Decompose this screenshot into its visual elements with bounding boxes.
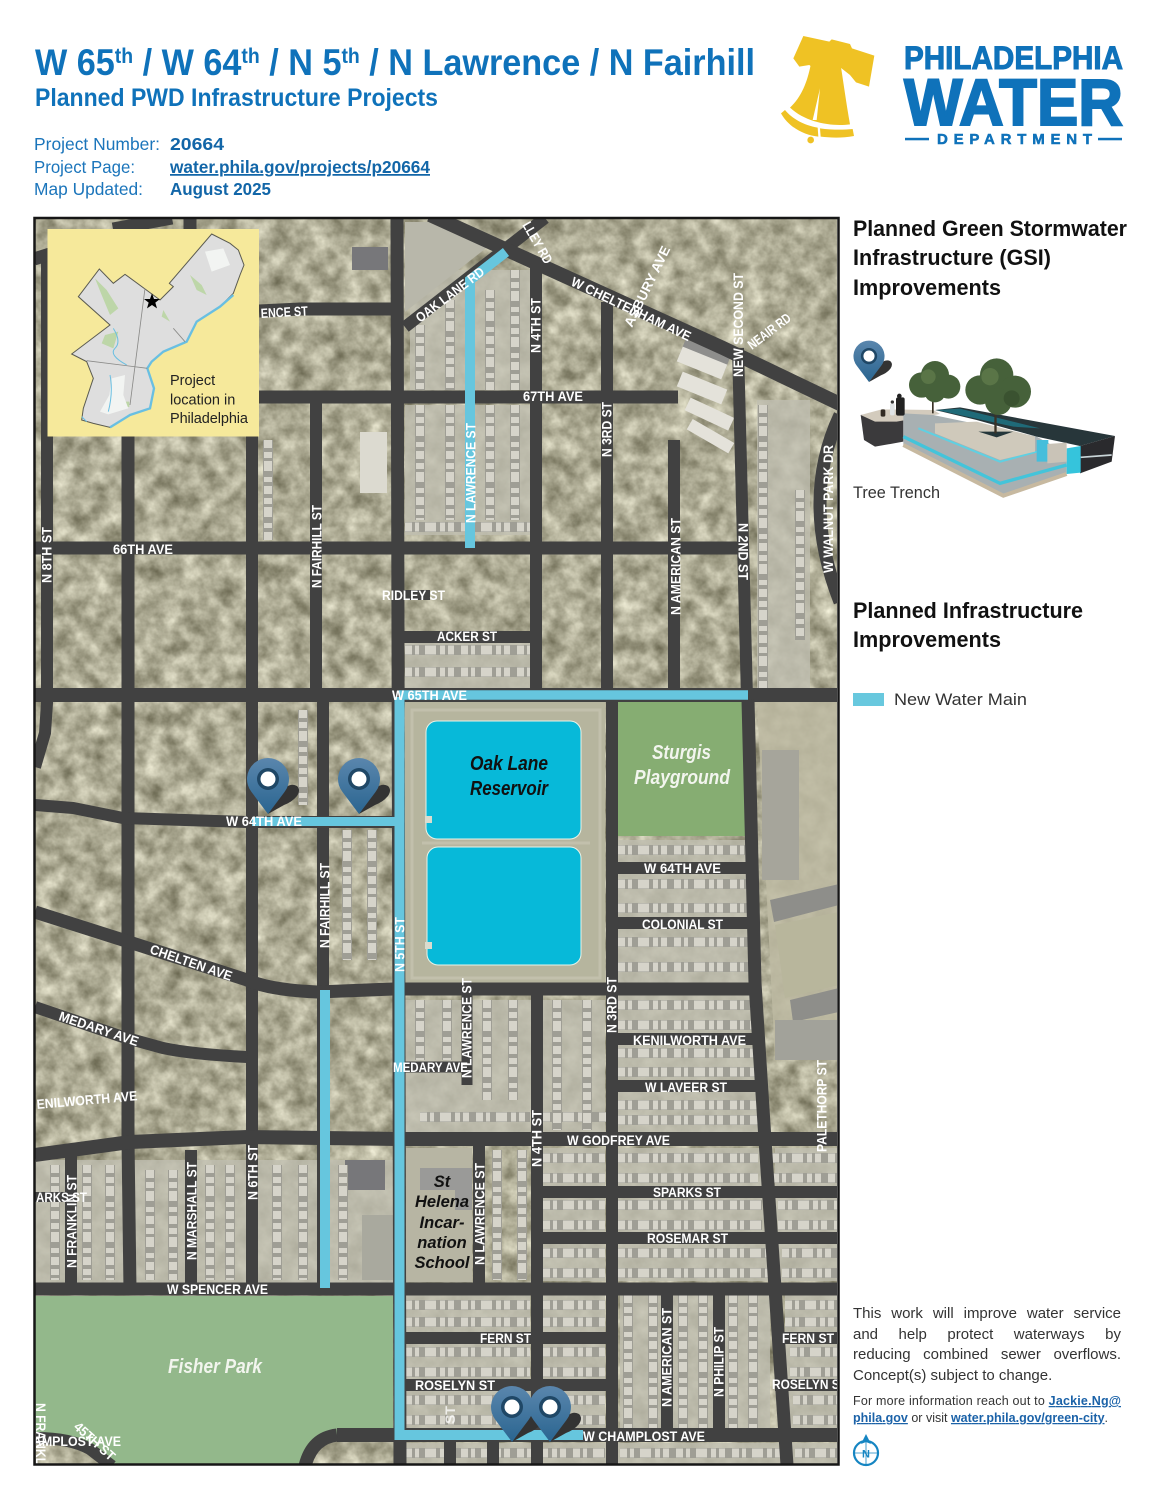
street labels: OAK LANE RD xyxy=(413,264,487,325)
street labels: N AMERICAN ST xyxy=(660,1307,674,1407)
icon: legend pin xyxy=(853,341,892,382)
project description: reducing combined sewer overflows. xyxy=(853,1346,1121,1363)
illustration: tree trench xyxy=(861,358,1115,496)
street labels: ARKS ST xyxy=(36,1190,88,1205)
street labels: N FRANKLIN ST xyxy=(64,1174,80,1268)
inset locator map: Project xyxy=(170,373,215,389)
project details: Project Page: xyxy=(34,157,135,177)
title: / N 5 xyxy=(260,42,341,83)
place names: Reservoir xyxy=(470,778,549,800)
aerial imagery base xyxy=(34,218,838,1465)
title: th xyxy=(241,45,260,68)
street labels: FERN ST xyxy=(480,1331,532,1346)
street labels: ACKER ST xyxy=(437,629,498,644)
street labels: W GODFREY AVE xyxy=(567,1133,670,1148)
project description: Concept(s) subject to change. xyxy=(853,1366,1052,1384)
street labels: ROSELYN ST xyxy=(772,1377,848,1392)
place names: Helena xyxy=(415,1193,469,1211)
logo wordmark: PHILADELPHIA xyxy=(904,40,1123,76)
GSI heading: Infrastructure (GSI) xyxy=(853,245,1051,270)
map xyxy=(15,215,848,1497)
logo wordmark: DEPARTMENT xyxy=(937,131,1092,148)
place names xyxy=(168,742,731,1378)
street labels: N LAWRENCE ST xyxy=(464,422,478,523)
street labels: 66TH AVE xyxy=(113,542,173,557)
new water main lines xyxy=(252,252,748,1435)
project pin: Champlost west xyxy=(491,1386,543,1442)
title: / N Lawrence / N Fairhill xyxy=(360,42,755,83)
street labels: N AMERICAN ST xyxy=(668,517,684,615)
place names: nation xyxy=(417,1234,467,1252)
street labels: 45TH ST xyxy=(71,1419,119,1464)
reservoir basin: north xyxy=(426,721,581,839)
project details: August 2025 xyxy=(170,179,271,199)
title: W 65 xyxy=(35,42,121,83)
street labels: N 4TH ST xyxy=(528,297,544,353)
GSI heading: Planned Green Stormwater xyxy=(853,216,1127,241)
street labels: FERN ST xyxy=(782,1331,835,1346)
street labels: W CHAMPLOST AVE xyxy=(583,1429,705,1444)
project pin: Champlost east xyxy=(529,1386,581,1442)
place names: Incar- xyxy=(420,1214,465,1232)
street labels: 67TH AVE xyxy=(523,389,583,404)
project details: water.phila.gov/projects/p20664 xyxy=(169,157,430,177)
street labels: N 6TH ST xyxy=(246,1144,260,1200)
reservoir basin: south xyxy=(427,847,581,965)
reservoir paths xyxy=(412,710,600,978)
reservoir inlets xyxy=(425,816,432,949)
street labels: LLEY RD xyxy=(519,219,555,267)
map frame xyxy=(34,218,838,1464)
row houses xyxy=(55,270,839,1453)
street labels: N MARSHALL ST xyxy=(184,1161,200,1260)
street labels: N 5TH ST xyxy=(392,916,408,972)
street labels: MEDARY AVE xyxy=(393,1060,468,1075)
street labels: ST xyxy=(443,1405,458,1424)
place names: Fisher Park xyxy=(168,1356,263,1378)
title: th xyxy=(115,45,133,68)
street labels: NEAIR RD xyxy=(745,310,794,352)
project details: Map Updated: xyxy=(34,179,143,199)
street labels: N 2ND ST xyxy=(736,523,750,581)
project description: and help protect waterways by xyxy=(853,1326,1121,1342)
street labels: ENCE ST xyxy=(260,304,309,321)
inset locator map: location in xyxy=(170,392,235,408)
GSI heading: Improvements xyxy=(853,275,1001,300)
logo wordmark: WATER xyxy=(904,65,1123,139)
project details xyxy=(34,134,430,199)
street labels: N LAWRENCE ST xyxy=(472,1162,488,1265)
street labels: W CHELTENHAM AVE xyxy=(569,274,693,344)
street labels: ENILWORTH AVE xyxy=(36,1088,138,1112)
street labels: ROSEMAR ST xyxy=(647,1231,729,1246)
street labels: N FAIRHILL ST xyxy=(318,862,332,948)
project description: This work will improve water service xyxy=(853,1305,1121,1322)
icon: north arrow xyxy=(854,1434,878,1465)
street labels: W WALNUT PARK DR xyxy=(821,445,836,573)
street labels: W 64TH AVE xyxy=(226,814,302,829)
street labels: N FAIRHILL ST xyxy=(310,504,324,588)
project pin: W 64th east xyxy=(338,758,390,814)
street labels: N PHILIP ST xyxy=(712,1326,726,1397)
project description xyxy=(853,1305,1121,1384)
park: Fisher Park xyxy=(35,1296,393,1465)
street labels: PALETHORP ST xyxy=(814,1059,830,1152)
GSI heading xyxy=(853,216,1127,300)
street labels: MEDARY AVE xyxy=(57,1009,141,1049)
street labels: CHAMPLOST AVE xyxy=(15,1434,121,1449)
inset locator map xyxy=(48,229,259,436)
contact note: For more information reach out to Jackie.Ng@ xyxy=(853,1394,1121,1408)
street labels: N 8TH ST xyxy=(40,526,54,583)
planned infrastructure heading: Planned Infrastructure xyxy=(853,598,1083,623)
street labels: COLONIAL ST xyxy=(642,917,724,932)
street labels: NEW SECOND ST xyxy=(731,272,746,377)
logo wordmark xyxy=(904,40,1123,148)
street labels: W LAVEER ST xyxy=(645,1080,728,1095)
street labels: N 4TH ST xyxy=(530,1109,544,1167)
street labels: N LAWRENCE ST xyxy=(460,977,474,1078)
title: / W 64 xyxy=(133,42,242,83)
street labels: W 65TH AVE xyxy=(392,688,467,703)
contact note: phila.gov or visit water.phila.gov/green-city. xyxy=(853,1411,1108,1425)
project details: Project Number: xyxy=(34,134,160,154)
street labels: W SPENCER AVE xyxy=(167,1282,268,1297)
street labels: N 3RD ST xyxy=(604,976,620,1033)
street labels xyxy=(15,219,848,1497)
aerial lots and buildings xyxy=(35,222,839,1465)
street labels: N 3RD ST xyxy=(600,401,614,457)
place names: School xyxy=(414,1254,470,1272)
icon: liberty bell logo xyxy=(781,36,874,143)
place names: Sturgis xyxy=(652,742,711,764)
street labels: SPARKS ST xyxy=(653,1185,722,1200)
subtitle: Planned PWD Infrastructure Projects xyxy=(35,84,438,112)
planned infrastructure heading xyxy=(853,598,1083,652)
street labels: ASBURY AVE xyxy=(621,244,673,329)
project pin: W 64th west xyxy=(247,758,299,814)
place names: St xyxy=(434,1173,452,1191)
street labels: RIDLEY ST xyxy=(382,588,446,603)
planned infrastructure heading: Improvements xyxy=(853,627,1001,652)
title: th xyxy=(341,45,360,68)
park: Sturgis Playground xyxy=(617,702,745,836)
street labels: ROSELYN ST xyxy=(415,1378,496,1393)
legend: new water main: New Water Main xyxy=(894,690,1027,709)
street labels: KENILWORTH AVE xyxy=(633,1033,746,1048)
contact note xyxy=(853,1394,1121,1425)
street labels: W 64TH AVE xyxy=(644,861,721,876)
tree trench caption: Tree Trench xyxy=(853,483,940,502)
icon: north arrow: N xyxy=(862,1448,870,1460)
road network xyxy=(34,215,840,1466)
place names: Playground xyxy=(634,767,731,789)
street labels: CHELTEN AVE xyxy=(148,942,234,984)
project details: 20664 xyxy=(170,134,224,154)
place names: Oak Lane xyxy=(470,753,548,775)
inset locator map: Philadelphia xyxy=(170,411,249,427)
reservoir grounds xyxy=(405,702,605,983)
